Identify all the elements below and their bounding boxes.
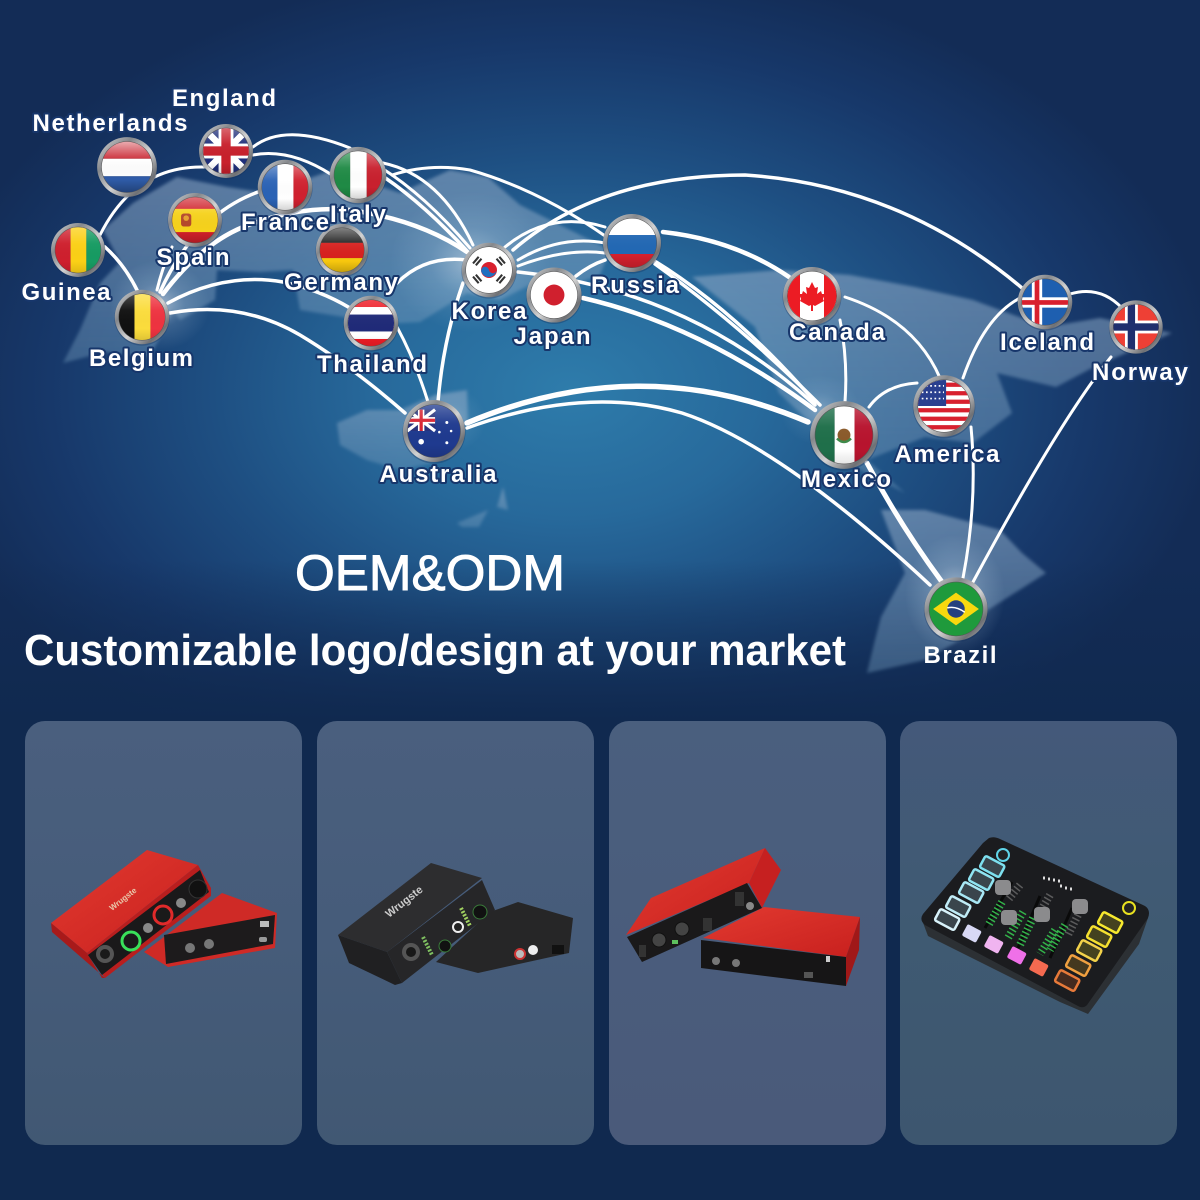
product: red interface, front unit <box>51 850 211 978</box>
flag: Italy <box>329 147 387 205</box>
panel: black audio interface set <box>317 721 594 1145</box>
flag: Spain <box>168 193 222 248</box>
product: black interface, rear unit <box>436 902 573 973</box>
product: red interface, upper unit <box>626 848 781 962</box>
flag: Belgium <box>114 290 170 346</box>
flag: Australia <box>402 400 466 464</box>
product: black interface, front unit: Wrugste <box>383 884 425 920</box>
country labels: Netherlands <box>32 110 188 137</box>
flag: Guinea <box>51 223 105 278</box>
country labels: Norway <box>1092 359 1189 386</box>
light glows at hubs <box>110 192 1005 655</box>
country labels: Korea <box>452 298 527 325</box>
flag: Brazil <box>924 577 988 642</box>
flag: England <box>199 124 253 179</box>
product: streaming mixer <box>921 837 1149 1014</box>
country labels: England <box>172 85 276 112</box>
flag: Norway <box>1109 300 1163 355</box>
country labels: Australia <box>380 461 497 488</box>
country labels: Brazil <box>924 642 996 669</box>
flag: Germany <box>315 224 369 277</box>
product: black interface, front unit <box>338 863 495 985</box>
mixer bottom buttons <box>962 924 1049 977</box>
country labels: Guinea <box>22 279 111 306</box>
flag: Mexico <box>809 401 879 471</box>
country labels: France <box>241 209 329 236</box>
subheading: Customizable logo/design at your market <box>24 626 846 675</box>
panel: red audio interface set <box>25 721 302 1145</box>
product: red interface, lower unit <box>701 907 860 986</box>
country labels: Thailand <box>317 351 427 378</box>
flag: Korea <box>461 243 517 299</box>
country labels: Japan <box>514 323 590 350</box>
flag: France <box>257 160 313 216</box>
flag: Iceland <box>1017 275 1073 331</box>
flag: Japan <box>526 267 582 324</box>
country labels <box>22 85 1189 669</box>
flag: Canada <box>782 267 842 326</box>
heading: OEM&ODM: OEM&ODM <box>295 545 565 601</box>
flag: America <box>913 375 975 438</box>
flag: Thailand <box>343 296 399 352</box>
product: red interface, rear unit <box>144 893 277 967</box>
world map <box>63 170 1172 673</box>
connection lines <box>100 135 1122 585</box>
country labels: Mexico <box>801 466 891 493</box>
country labels: Iceland <box>1000 329 1094 356</box>
panel: red interface rear view set <box>609 721 886 1145</box>
country labels: Italy <box>330 201 387 228</box>
country labels: America <box>894 441 1000 468</box>
country labels: Canada <box>789 319 886 346</box>
flag: Russia <box>602 214 662 274</box>
panel: mixer <box>900 721 1177 1145</box>
mixer left button column <box>934 849 1009 930</box>
product: red interface, front unit: Wrugste <box>108 886 139 913</box>
mixer right button column <box>1054 902 1135 991</box>
country labels: Russia <box>591 272 680 299</box>
country labels: Germany <box>284 269 399 296</box>
country labels: Belgium <box>89 345 193 372</box>
mixer faders and level meters <box>985 878 1088 958</box>
flag: Netherlands <box>97 137 157 198</box>
country labels: Spain <box>156 244 230 271</box>
